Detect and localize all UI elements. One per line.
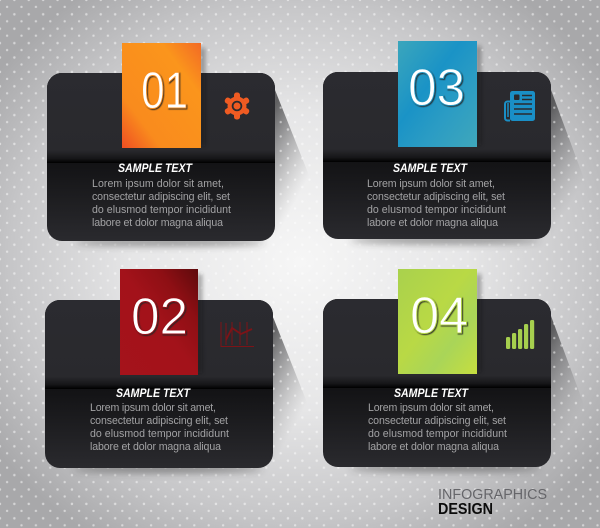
number tag 01: 01 [141, 62, 188, 120]
text block 01: consectetur adipiscing elit, set [92, 191, 230, 203]
text block 01: do elusmod tempor incididunt [92, 204, 231, 216]
heading 01: SAMPLE TEXT [118, 161, 193, 175]
icon: signal bars [506, 320, 534, 349]
heading 03: SAMPLE TEXT [393, 161, 468, 175]
title: infographics design: INFOGRAPHICS [438, 486, 547, 503]
text block 03: Lorem ipsum dolor sit amet, [367, 178, 495, 190]
number tag 04: 04 [410, 287, 468, 345]
text block 02 [90, 402, 229, 453]
panel: card 03 [323, 41, 551, 244]
long shadows behind the cards [273, 90, 600, 472]
number tag 03 [398, 41, 477, 147]
number tag 03: 03 [408, 59, 465, 117]
icon: line chart [221, 322, 254, 346]
text block 02: do elusmod tempor incididunt [90, 428, 229, 440]
number tag 02: 02 [131, 288, 188, 346]
text block 04 [368, 402, 507, 453]
text block 03: labore et dolor magna aliqua [367, 217, 498, 229]
title: infographics design: DESIGN [438, 501, 493, 518]
number tag 01 [122, 43, 201, 148]
text block 03: do elusmod tempor incididunt [367, 204, 506, 216]
heading 04: SAMPLE TEXT [394, 386, 469, 400]
icon: newspaper [505, 91, 535, 121]
text block 02: consectetur adipiscing elit, set [90, 415, 228, 427]
number tag 02 [120, 269, 198, 375]
text block 01 [92, 178, 231, 229]
text block 01: labore et dolor magna aliqua [92, 217, 223, 229]
text block 04: do elusmod tempor incididunt [368, 428, 507, 440]
title: infographics design [438, 486, 547, 518]
text block 02: labore et dolor magna aliqua [90, 441, 221, 453]
text block 04: labore et dolor magna aliqua [368, 441, 499, 453]
text block 03: consectetur adipiscing elit, set [367, 191, 505, 203]
text block 04: consectetur adipiscing elit, set [368, 415, 506, 427]
text block 01: Lorem ipsum dolor sit amet, [92, 178, 224, 190]
panel: card 04 [323, 269, 551, 472]
icon: gear [224, 92, 250, 120]
panel: card 02 [45, 269, 273, 472]
panel: card 01 [47, 43, 275, 246]
text block 04: Lorem ipsum dolor sit amet, [368, 402, 494, 414]
heading 02: SAMPLE TEXT [116, 386, 191, 400]
text block 02: Lorem ipsum dolor sit amet, [90, 402, 216, 414]
number tag 04 [398, 269, 477, 374]
text block 03 [367, 178, 506, 229]
